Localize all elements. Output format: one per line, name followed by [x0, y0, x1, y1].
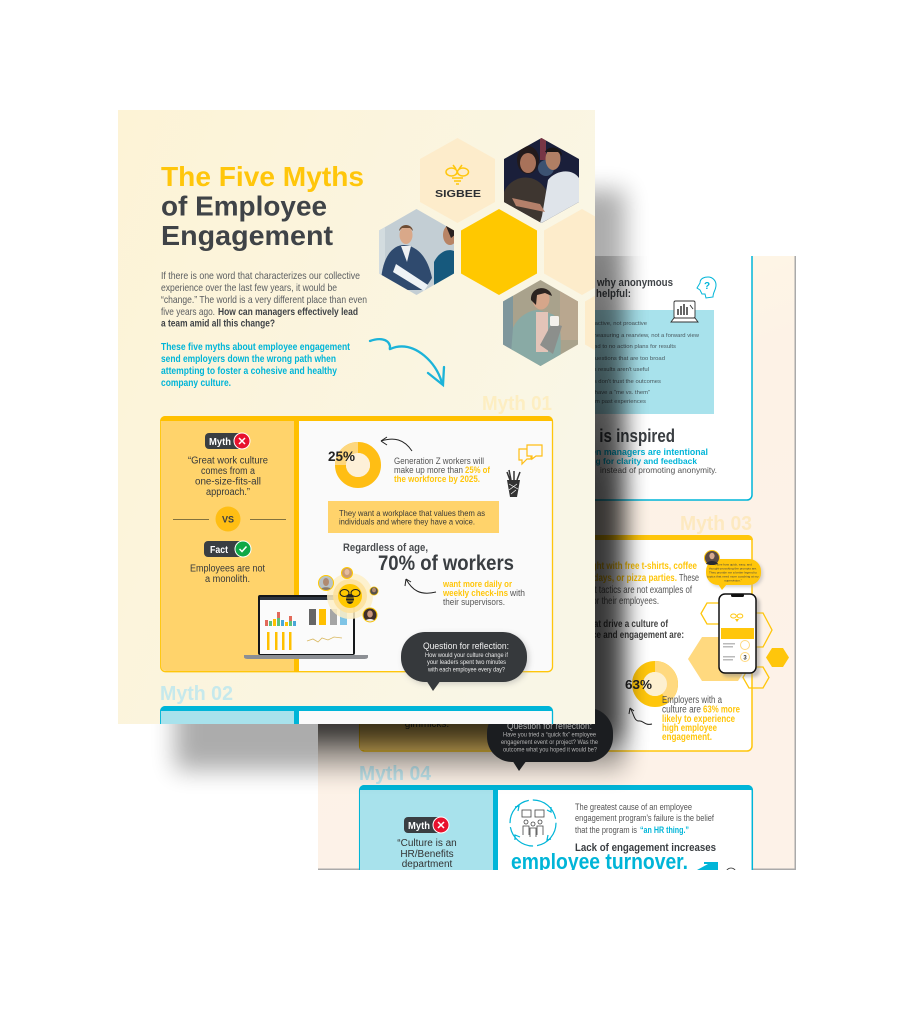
text: fact statement: Employees are not — [190, 564, 265, 574]
text: employers with a culture: Employers with a — [662, 695, 722, 706]
text: check-ins: with — [509, 588, 525, 598]
chart: 25% donut — [328, 442, 376, 482]
icon: phone with app: 3 — [743, 656, 747, 662]
text: quick fixes paragraph: These — [679, 573, 699, 584]
back page shadow and background — [318, 256, 796, 870]
text: HR thing paragraph: engagement program's failure is the belief — [575, 813, 714, 823]
front page shadow on back page — [318, 256, 641, 759]
text: intro paragraph: How can managers effectively lead — [218, 306, 358, 318]
heading: myth 02: Myth 02 — [160, 683, 233, 705]
callout: question for reflection myth 03: Question for reflection: — [507, 721, 592, 731]
text: fact statement: a monolith. — [205, 574, 250, 585]
callout: question for reflection myth 01: with each employee every day? — [427, 666, 505, 674]
icon: pencil cup — [507, 470, 520, 497]
text: generation z — [394, 456, 491, 484]
chart: 25% donut: 25% — [328, 448, 356, 464]
text: check-ins: their supervisors. — [443, 597, 505, 607]
panel: myth 02 card — [595, 256, 753, 501]
text: myth statement — [188, 456, 268, 498]
text: teal intro callout: company culture. — [161, 377, 231, 389]
text: myth statement: comes from a — [201, 466, 255, 477]
text: employers with a culture: culture are — [662, 704, 701, 716]
photo: businessman in blazer — [379, 209, 457, 295]
panel: teal list of reasons: They use questions that are too broad — [566, 356, 665, 362]
heading: why anonymous surveys: why anonymous — [596, 277, 673, 289]
text: myth 04 statement: “Culture is an — [397, 838, 457, 849]
title — [161, 161, 364, 251]
text: check-ins — [442, 579, 525, 607]
callout: employee quote bubble: They provide me a better legend to — [709, 570, 757, 574]
badge: myth: Myth — [209, 437, 231, 448]
icon: bee logo — [446, 165, 468, 184]
text: intro paragraph: five years ago. — [161, 306, 215, 318]
text: generation z: make up more than — [394, 465, 463, 475]
callout: question for reflection myth 03: outcome what you hoped it would be? — [503, 746, 597, 754]
text: HR thing paragraph: The greatest cause of an employee — [575, 802, 692, 812]
panel: myth 02 card top — [160, 706, 553, 747]
text: quick fixes paragraph: short-term engagement tactics are not examples of — [515, 584, 692, 595]
text: regardless of age: Regardless of age, — [343, 542, 428, 554]
text: trust is inspired: Trust is inspired — [558, 426, 675, 446]
text: generation z: 25% of — [465, 465, 491, 475]
callout: question for reflection myth 03: Have you tried a “quick fix” employee — [503, 732, 597, 738]
text: teal intro callout: attempting to foster a cohesive and healthy — [161, 365, 337, 377]
callout: employee quote bubble: “I love how quick, easy, and — [714, 562, 752, 566]
back page — [318, 240, 796, 906]
chart: 63% donut: 63% — [625, 677, 652, 692]
photo: woman with coffee — [503, 280, 578, 366]
text: quick fixes paragraph: employee performance and engagement are: — [513, 629, 684, 640]
panel: teal list of reasons: Employees don't trust the outcomes — [568, 379, 661, 385]
panel: teal list of reasons: They often lead to no action plans for results — [560, 344, 676, 350]
text: check-ins: want more daily or — [442, 579, 512, 589]
text: teal intro callout — [161, 341, 350, 389]
icon: bee with employee avatars — [318, 567, 379, 623]
text: HR thing paragraph: that the program is — [575, 825, 638, 835]
panel: teal list of reasons — [595, 310, 714, 414]
text: generation z: Generation Z workers will — [394, 456, 484, 466]
icon: circle outline — [726, 868, 736, 870]
hexagon: yellow — [461, 209, 537, 295]
callout: yellow highlight: They want a workplace that values them as — [339, 508, 485, 518]
text: myth 04 statement: department — [402, 859, 453, 870]
panel: teal list of reasons: They are measuring a rearview, not a forward view — [567, 333, 700, 339]
text: employers with a culture: 63% more — [703, 704, 740, 716]
callout: question for reflection myth 01: Question for reflection: — [423, 641, 509, 651]
decorative hexagons — [688, 603, 789, 688]
text: intro paragraph: experience over the last few years, it would be — [161, 282, 337, 294]
badge: myth — [205, 433, 250, 449]
panel: teal list of reasons: Surveys are reactive, not proactive — [556, 321, 648, 327]
photo: two colleagues at night — [504, 138, 579, 223]
text: intro paragraph: a team amid all this change? — [161, 318, 275, 330]
callout: yellow highlight — [328, 501, 499, 533]
callout: yellow highlight: individuals and where they have a voice. — [339, 516, 475, 526]
text: quick fixes paragraph — [595, 562, 699, 640]
text: employers with a culture: likely to experience — [662, 714, 735, 725]
text: myth statement: approach.” — [206, 487, 250, 498]
text: intro paragraph — [161, 270, 367, 330]
hexagon: pale lower right — [585, 280, 660, 366]
hexagon: sigbee logo — [420, 138, 495, 223]
panel: teal list of reasons: Employees have a “me vs. them” — [564, 390, 650, 396]
icon: versus: VS — [222, 514, 234, 524]
text: quick fixes paragraph: Culture can't be bought with free t-shirts, coffee — [514, 560, 697, 571]
text: teal intro callout: send employers down the wrong path when — [161, 353, 336, 365]
text: HR thing paragraph — [575, 802, 714, 835]
panel: myth 01 card — [160, 416, 553, 691]
panel: teal list of reasons: attitude from past experiences — [567, 399, 646, 405]
icon: head with question mark: ? — [704, 281, 710, 292]
front page — [118, 110, 595, 724]
arrow: blue swoosh — [370, 339, 444, 385]
heading: myth 01: Myth 01 — [482, 393, 552, 415]
icon: laptop with chart — [671, 301, 698, 322]
text: myth 04 statement — [397, 838, 457, 870]
chart: 63% donut — [625, 661, 678, 703]
callout: question for reflection myth 01: How would your culture change if — [425, 652, 508, 659]
callout: employee quote bubble: thought-provoking the prompts are. — [709, 566, 757, 570]
badge: fact: Fact — [210, 545, 229, 556]
title: The Five Myths — [161, 161, 364, 192]
badge: myth: Myth — [408, 821, 430, 832]
text: trust is inspired: about asking for clarity and feedback — [549, 456, 697, 466]
text: employee turnover: employee turnover. — [511, 849, 688, 874]
text: employers with a culture: engagement. — [662, 732, 712, 743]
icon: speech bubbles — [519, 445, 542, 464]
callout: question for reflection myth 03 — [487, 708, 613, 771]
text: myth statement: one-size-fits-all — [195, 476, 261, 488]
front page shadow on white — [175, 190, 625, 770]
heading: why anonymous surveys: are not helpful: — [561, 289, 631, 300]
badge: myth — [404, 817, 449, 833]
text: quick fixes paragraph: The key factors that drive a culture of — [525, 618, 668, 629]
icon: phone with app — [719, 594, 760, 677]
text: check-ins: weekly check-ins — [442, 588, 508, 598]
icon: head with question mark — [697, 277, 716, 298]
text: employers with a culture: high employee — [662, 723, 717, 734]
arrow: squiggle to donut — [629, 708, 652, 724]
panel: teal list of reasons: The anonymous results aren't useful — [554, 367, 649, 373]
icon: employee avatar — [704, 550, 720, 566]
icon: versus — [173, 506, 286, 532]
callout: question for reflection myth 03: engagement event or project? Was the — [501, 739, 598, 746]
text: trust is inspired — [595, 428, 716, 474]
panel: myth 04 card — [358, 785, 754, 870]
panel: myth 03 card — [359, 535, 789, 751]
text: quick fixes paragraph: how employers care for their employees. — [518, 595, 659, 606]
icon: people in a cycle — [510, 800, 556, 846]
text: employers with a culture — [662, 695, 740, 743]
text: 70% of workers: 70% of workers — [378, 552, 514, 575]
text: teal intro callout: These five myths about employee engagement — [161, 341, 350, 353]
text: lack of engagement: Lack of engagement increases — [575, 842, 716, 854]
callout: employee quote bubble: topics that need more coaching at my — [707, 574, 759, 578]
callout: question for reflection myth 01: your leaders spent two minutes — [427, 659, 506, 666]
heading: why anonymous surveys — [596, 278, 673, 300]
text: myth statement end: gimmicks. — [405, 719, 449, 730]
text: fact statement — [190, 564, 265, 585]
icon: laptop with dashboard — [244, 595, 368, 659]
icon: rising arrow — [697, 862, 718, 870]
title: Engagement — [161, 220, 333, 251]
callout: question for reflection myth 01 — [401, 632, 529, 691]
arrow: to 70% — [405, 579, 436, 593]
callout: employee quote bubble — [704, 550, 763, 590]
text: generation z: the workforce by 2025. — [394, 474, 480, 484]
text: intro paragraph: “change.” The world is a very different place than even — [161, 294, 367, 306]
text: myth statement: “Great work culture — [188, 456, 268, 466]
text: quick fixes paragraph: gift cards, casual dress days, or pizza parties. — [502, 572, 677, 583]
text: HR thing paragraph: “an HR thing.” — [640, 825, 689, 835]
front page background — [118, 110, 595, 724]
text: trust is inspired: instead of promoting anonymity. — [600, 465, 717, 475]
heading: myth 04: Myth 04 — [359, 763, 432, 785]
callout: employee quote bubble: supervision.” — [724, 578, 742, 582]
badge: fact — [204, 541, 251, 557]
text: sigbee wordmark: SIGBEE — [435, 188, 481, 200]
arrow: curved to donut — [381, 437, 412, 451]
text: intro paragraph: If there is one word that characterizes our collective — [161, 270, 360, 282]
title: of Employee — [161, 190, 327, 222]
text: trust is inspired: when managers are intentional — [578, 447, 708, 457]
heading: myth 03: Myth 03 — [680, 513, 752, 535]
text: myth 04 statement: HR/Benefits — [400, 849, 454, 860]
hexagon: pale right — [544, 209, 620, 295]
